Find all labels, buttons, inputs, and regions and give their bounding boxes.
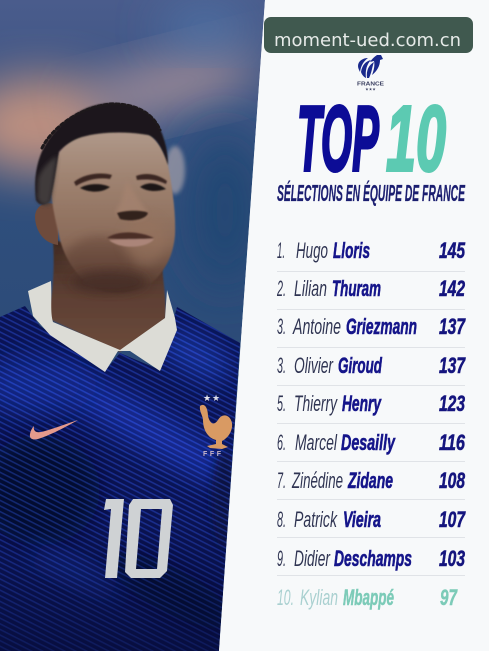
collar <box>28 281 177 372</box>
jersey <box>0 300 255 651</box>
row 7: 108 <box>439 468 466 493</box>
face <box>51 132 176 280</box>
row 4: 3. <box>277 353 286 378</box>
row 5: Thierry <box>294 391 338 416</box>
title: TOP <box>297 86 379 190</box>
row 2 <box>277 276 466 301</box>
nose <box>118 192 144 212</box>
row 6 <box>277 430 466 455</box>
row 1: 145 <box>439 238 466 263</box>
row 3: 3. <box>277 314 286 339</box>
row 10 <box>277 585 458 610</box>
jersey number 10 <box>104 499 173 578</box>
row 1: Lloris <box>333 238 370 263</box>
eyes <box>80 183 166 192</box>
row 9: Didier <box>294 546 331 571</box>
row 3: Griezmann <box>346 314 417 339</box>
ear <box>35 203 58 245</box>
row 7 <box>277 468 466 493</box>
row 6: Marcel <box>295 430 338 455</box>
row 7: 7. <box>277 468 286 493</box>
row 10: 10. <box>277 585 294 610</box>
row 10: 97 <box>440 585 458 610</box>
row 5: 123 <box>439 391 465 416</box>
row 3: Antoine <box>292 314 341 339</box>
row 3: 137 <box>439 314 466 339</box>
row 6: Desailly <box>341 430 396 455</box>
row 4: 137 <box>439 353 466 378</box>
hair <box>35 103 168 205</box>
blurred light behind head <box>165 146 185 194</box>
row 9: 103 <box>439 546 465 571</box>
row 4: Olivier <box>294 353 334 378</box>
row 2: Thuram <box>332 276 381 301</box>
row 8 <box>277 507 466 532</box>
neck <box>47 240 166 352</box>
watermark badge <box>264 17 473 53</box>
row 3 <box>277 314 466 339</box>
logo stars: ★★★ <box>365 86 376 92</box>
crest: rooster with stars: ★ <box>203 393 211 403</box>
row 1 <box>277 238 466 263</box>
row 6: 116 <box>439 430 466 455</box>
row 4: Giroud <box>338 353 382 378</box>
title: 10 <box>386 86 446 190</box>
row 1: 1. <box>277 238 285 263</box>
row 2: 142 <box>439 276 466 301</box>
row 2: Lilian <box>294 276 327 301</box>
crest: rooster with stars: FFF <box>203 451 222 458</box>
row 8: Vieira <box>343 507 381 532</box>
row 5 <box>277 391 465 416</box>
row 5: Henry <box>342 391 382 416</box>
row 9 <box>277 546 465 571</box>
row 10: Kylian <box>300 585 338 610</box>
row 8: 107 <box>439 507 466 532</box>
background photo <box>0 0 270 651</box>
row 7: Zidane <box>347 468 393 493</box>
row 6: 6. <box>277 430 286 455</box>
mouth <box>107 232 154 247</box>
swoosh logo <box>30 420 78 439</box>
crest: rooster with stars <box>200 393 232 458</box>
federation logo <box>357 55 384 92</box>
row 9: Deschamps <box>334 546 412 571</box>
ranking list <box>277 238 466 610</box>
row 5: 5. <box>277 391 286 416</box>
row 8: 8. <box>277 507 286 532</box>
eyebrows <box>74 173 167 186</box>
row 8: Patrick <box>294 507 338 532</box>
crest: rooster with stars: ★ <box>212 393 220 403</box>
row 2: 2. <box>277 276 286 301</box>
row 10: Mbappé <box>343 585 394 610</box>
logo wordmark: FRANCE <box>357 82 384 88</box>
row 4 <box>277 353 466 378</box>
watermark badge: moment-ued.com.cn <box>274 30 461 51</box>
white panel <box>219 0 489 651</box>
row 9: 9. <box>277 546 286 571</box>
row 7: Zinédine <box>291 468 343 493</box>
row 1: Hugo <box>296 238 328 263</box>
